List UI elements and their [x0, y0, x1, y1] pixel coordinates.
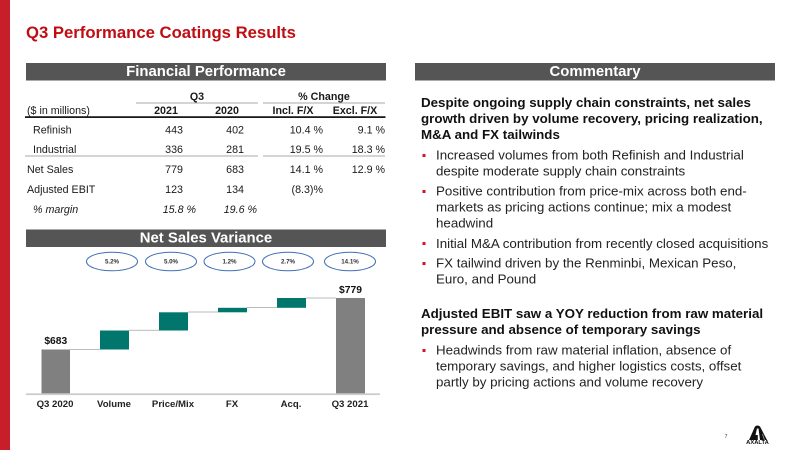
- table: financial results: (8.3)%: [292, 184, 323, 196]
- table: financial results: 2021: [154, 105, 178, 117]
- commentary: adjusted EBIT: pressure and absence of temporary savings: [421, 322, 701, 337]
- commentary: net sales: markets as pricing actions continue; mix a modest: [436, 200, 731, 214]
- waterfall chart: Q3 2021: [332, 399, 369, 410]
- commentary: net sales: Euro, and Pound: [436, 272, 536, 286]
- percent callout ovals: 2.7%: [281, 258, 296, 266]
- waterfall chart: Q3 2020: [37, 399, 73, 410]
- table: financial results: Refinish: [33, 124, 72, 136]
- waterfall chart: FX: [226, 399, 239, 410]
- commentary: net sales: Despite ongoing supply chain constraints, net sales: [421, 95, 751, 110]
- table: financial results: 683: [226, 164, 244, 176]
- percent callout ovals: 5.0%: [164, 258, 179, 266]
- table: financial results: 281: [226, 144, 244, 156]
- commentary: adjusted EBIT: partly by pricing actions and volume recovery: [436, 374, 703, 390]
- table: financial results: % Change: [298, 91, 350, 103]
- percent callout ovals: 5.2%: [105, 258, 120, 266]
- table: financial results: 12.9 %: [352, 164, 385, 176]
- percent callout ovals: 14.1%: [341, 258, 359, 266]
- table: financial results: Excl. F/X: [333, 105, 378, 117]
- waterfall chart: Acq.: [281, 399, 301, 410]
- percent callout ovals: 1.2%: [222, 258, 237, 266]
- table: financial results: 10.4 %: [290, 124, 323, 136]
- title: Q3 Performance Coatings Results: [26, 23, 296, 42]
- commentary: adjusted EBIT: Headwinds from raw material inflation, absence of: [436, 342, 731, 358]
- table: financial results: Q3: [190, 91, 204, 103]
- heading: net sales variance: Net Sales Variance: [140, 230, 272, 246]
- commentary: adjusted EBIT: Adjusted EBIT saw a YOY reduction from raw material: [421, 306, 763, 321]
- table: financial results: 9.1 %: [358, 124, 385, 136]
- commentary: net sales: Initial M&A contribution from recently closed acquisitions: [436, 236, 769, 251]
- panel: commentary: [415, 63, 775, 390]
- commentary: adjusted EBIT: temporary savings, and higher logistics costs, offset: [436, 358, 742, 374]
- icon: Axalta logo: [746, 426, 770, 446]
- table: financial results: [25, 91, 386, 216]
- table: financial results: 15.8 %: [163, 204, 196, 216]
- waterfall chart: Volume: [97, 399, 131, 410]
- commentary: net sales: [421, 95, 769, 286]
- table: financial results: 402: [226, 124, 244, 136]
- commentary: net sales: FX tailwind driven by the Renminbi, Mexican Peso,: [436, 256, 736, 270]
- commentary: net sales: Increased volumes from both Refinish and Industrial: [436, 148, 744, 162]
- table: financial results: 18.3 %: [352, 144, 385, 156]
- table: financial results: Net Sales: [27, 164, 73, 176]
- heading: net sales variance: [26, 230, 386, 247]
- table: financial results: 19.6 %: [224, 204, 257, 216]
- table: financial results: % margin: [33, 204, 78, 216]
- heading: commentary: [415, 63, 775, 80]
- heading: commentary: Commentary: [549, 64, 641, 80]
- table: financial results: 123: [165, 184, 183, 196]
- heading: financial performance: Financial Performance: [126, 64, 286, 80]
- table: financial results: 2020: [215, 105, 239, 117]
- page number: 7: [725, 434, 728, 440]
- left red accent bar: [0, 0, 10, 450]
- table: financial results: 19.5 %: [290, 144, 323, 156]
- table: financial results: 14.1 %: [290, 164, 323, 176]
- commentary: net sales: despite moderate supply chain constraints: [436, 164, 686, 178]
- commentary: net sales: M&A and FX tailwinds: [421, 127, 560, 142]
- table: financial results: ($ in millions): [27, 105, 90, 117]
- heading: financial performance: [26, 63, 386, 80]
- table: financial results: Adjusted EBIT: [27, 184, 96, 196]
- commentary: net sales: headwind: [436, 216, 493, 230]
- table: financial results: Industrial: [33, 144, 76, 156]
- table: financial results: Incl. F/X: [273, 105, 314, 117]
- waterfall chart: $779: [339, 285, 362, 296]
- waterfall chart: $683: [44, 336, 68, 347]
- percent callout ovals: [86, 252, 376, 271]
- table: financial results: 336: [165, 144, 183, 156]
- table: financial results: 134: [226, 184, 244, 196]
- panel: net sales variance: [26, 230, 386, 410]
- icon: Axalta logo: AXALTA: [746, 440, 770, 446]
- commentary: adjusted EBIT: [421, 306, 763, 390]
- commentary: net sales: growth driven by volume recovery, pricing realization,: [421, 111, 763, 126]
- waterfall chart: Price/Mix: [152, 399, 195, 410]
- commentary: net sales: Positive contribution from price-mix across both end-: [436, 184, 747, 198]
- table: financial results: 443: [165, 124, 183, 136]
- table: financial results: 779: [165, 164, 183, 176]
- waterfall chart: [26, 285, 380, 410]
- panel: financial performance: [25, 63, 386, 216]
